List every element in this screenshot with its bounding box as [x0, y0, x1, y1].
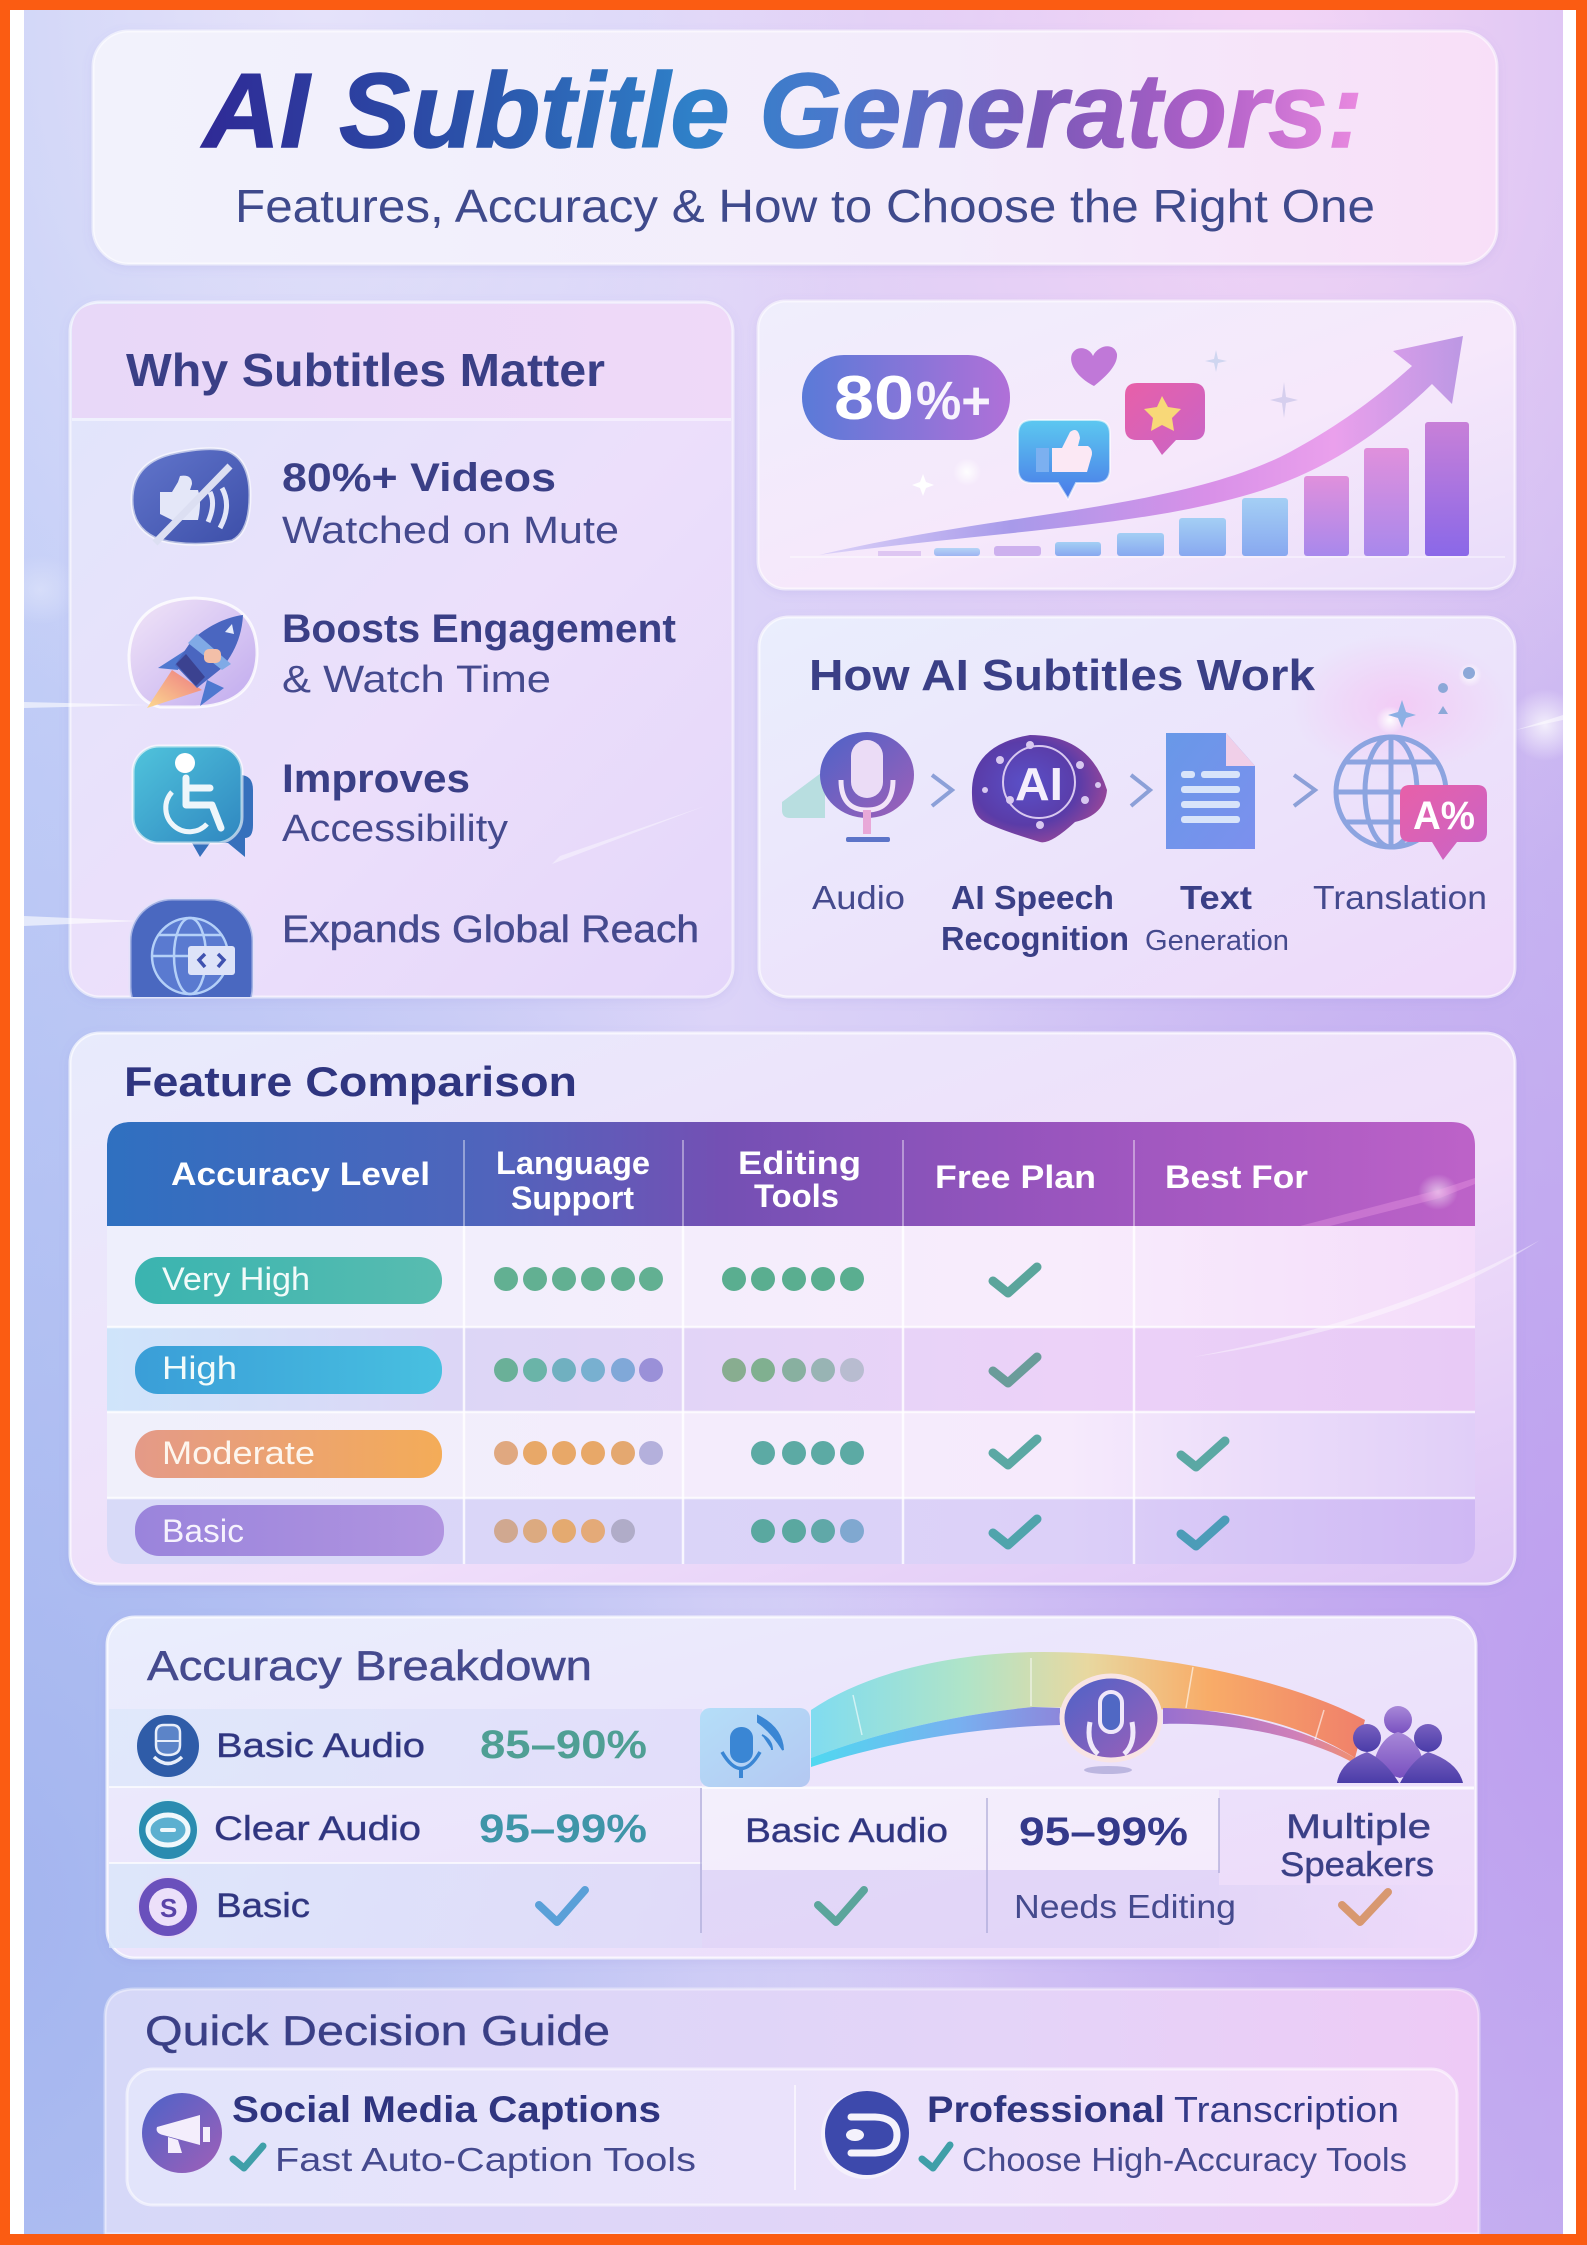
step: translation	[1313, 737, 1487, 916]
table header: Support	[511, 1180, 634, 1216]
item: expands global reach	[130, 899, 697, 997]
panel: how AI subtitles work	[759, 617, 1515, 997]
icon: basic tier: S	[160, 1893, 177, 1923]
arrow: growth trend	[819, 336, 1463, 555]
icon: basic tier	[138, 1877, 198, 1937]
icon: rocket	[129, 598, 257, 708]
option: professional transcription: Choose High-Accuracy Tools	[962, 2141, 1407, 2178]
table: rows	[107, 1226, 1540, 1564]
panel: feature comparison	[70, 1033, 1540, 1584]
item: improves accessibility: Accessibility	[282, 808, 508, 850]
item: boosts engagement: & Watch Time	[282, 659, 551, 701]
icon: multiple speakers	[1337, 1706, 1463, 1783]
row: basic	[135, 1505, 1225, 1556]
item: 80%+ videos	[132, 449, 619, 552]
row: moderate	[135, 1430, 1225, 1478]
check: multiple speakers	[1342, 1892, 1388, 1922]
row: basic audio	[136, 1714, 647, 1778]
step: text generation: Text	[1180, 879, 1252, 916]
table header	[107, 1122, 1475, 1226]
item: expands global reach: Expands Global Reach	[282, 909, 699, 951]
panel: why subtitles matter	[24, 302, 733, 1029]
option: professional transcription: Transcription	[1174, 2089, 1399, 2130]
row: basic audio: Basic Audio	[216, 1727, 425, 1765]
row: clear audio	[138, 1800, 647, 1860]
bar chart	[790, 422, 1505, 558]
row: basic: Basic	[162, 1513, 244, 1549]
row: high	[135, 1346, 1037, 1394]
option: social media captions: Fast Auto-Caption Tools	[275, 2141, 696, 2178]
icon: thumbs-up bubble	[1018, 420, 1110, 499]
table header: Language	[496, 1145, 650, 1181]
badge: 80%+: 80	[834, 364, 914, 433]
icon: clear audio	[138, 1800, 198, 1860]
icon: globe with translation bubble: A%	[1413, 794, 1475, 838]
table header: Editing	[738, 1145, 861, 1181]
item: boosts engagement	[129, 598, 676, 708]
subtitle: Features, Accuracy & How to Choose the Right One	[235, 180, 1375, 232]
arrow: text to translation	[1294, 775, 1315, 806]
step: text generation: Generation	[1145, 925, 1289, 957]
table header: Best For	[1165, 1159, 1308, 1195]
icon: document	[1166, 733, 1255, 849]
option: professional transcription	[821, 2089, 1407, 2179]
table header: Accuracy Level	[171, 1156, 430, 1192]
table cell: multiple speakers	[1280, 1808, 1434, 1884]
item: 80%+ videos: 80%+ Videos	[282, 456, 556, 500]
table header: Tools	[754, 1178, 839, 1214]
icon: globe with translation bubble	[1336, 737, 1487, 860]
heading: quick decision guide: Quick Decision Guide	[145, 2007, 610, 2054]
panel: quick decision guide	[105, 1989, 1479, 2234]
option: social media captions	[142, 2089, 696, 2178]
row: very high	[135, 1257, 1037, 1304]
step: audio	[782, 732, 914, 916]
panel: title	[93, 31, 1497, 264]
item: boosts engagement: Boosts Engagement	[282, 607, 676, 651]
icon: globe	[130, 899, 254, 997]
heading: main title: AI Subtitle Generators:	[200, 52, 1363, 170]
row bands	[109, 1709, 1474, 1948]
row: clear audio: Clear Audio	[214, 1810, 421, 1848]
row: basic	[138, 1877, 585, 1937]
icon: accessibility	[133, 746, 253, 857]
row: very high: Very High	[162, 1261, 310, 1297]
icon: microphone tile	[700, 1708, 810, 1787]
table cell: 95-99%: 95–99%	[1019, 1810, 1188, 1854]
option: professional transcription: Professional	[927, 2089, 1165, 2130]
row: high: High	[162, 1350, 237, 1386]
row: clear audio: 95–99%	[479, 1807, 647, 1851]
item: improves accessibility	[133, 746, 508, 857]
step: text generation	[1145, 733, 1289, 957]
panel: engagement chart	[758, 301, 1515, 589]
card: decision options	[127, 2069, 1457, 2205]
option: social media captions: Social Media Captions	[232, 2089, 661, 2130]
icon: megaphone	[142, 2093, 222, 2173]
icon: AI brain	[972, 735, 1107, 842]
heading: feature comparison: Feature Comparison	[124, 1058, 577, 1105]
step: AI speech recognition: AI Speech	[951, 879, 1114, 916]
gauge: accuracy arc	[700, 1652, 1463, 1787]
icon: headset microphone	[1062, 1676, 1160, 1774]
table cell: multiple speakers: Multiple	[1286, 1808, 1431, 1846]
icon: transcription	[821, 2091, 909, 2179]
icon: microphone	[782, 732, 914, 842]
item: improves accessibility: Improves	[282, 757, 470, 801]
panel: accuracy breakdown	[107, 1617, 1476, 1958]
streaks across left icons	[24, 702, 150, 926]
table cell: needs editing: Needs Editing	[1014, 1888, 1236, 1925]
step: AI speech recognition: Recognition	[941, 920, 1129, 957]
heading: accuracy breakdown: Accuracy Breakdown	[147, 1642, 592, 1689]
badge: 80%+	[802, 355, 1010, 440]
icon: basic audio	[136, 1714, 200, 1778]
check: basic audio	[818, 1890, 864, 1922]
step: audio: Audio	[812, 879, 905, 916]
heading: why subtitles matter: Why Subtitles Matter	[126, 344, 605, 396]
badge: 80%+: %+	[916, 371, 991, 431]
row: basic audio: 85–90%	[480, 1723, 647, 1767]
row: moderate: Moderate	[162, 1435, 315, 1471]
row: basic: Basic	[216, 1887, 310, 1925]
icon: star bubble	[1125, 383, 1205, 455]
table cell: multiple speakers: Speakers	[1280, 1846, 1434, 1884]
arrow: recognition to text	[1131, 775, 1150, 806]
icon: muted speaker	[132, 449, 250, 544]
step: translation: Translation	[1313, 879, 1487, 916]
arrow: audio to recognition	[932, 775, 952, 806]
heading: how AI subtitles work: How AI Subtitles Work	[809, 651, 1316, 700]
table header: Free Plan	[935, 1159, 1096, 1195]
item: 80%+ videos: Watched on Mute	[282, 510, 619, 552]
icon: heart	[1071, 346, 1117, 386]
table cell: basic audio: Basic Audio	[745, 1812, 948, 1850]
step: AI speech recognition	[941, 735, 1129, 957]
icon: sparkles	[912, 350, 1298, 496]
icon: AI brain: AI	[1015, 758, 1063, 810]
